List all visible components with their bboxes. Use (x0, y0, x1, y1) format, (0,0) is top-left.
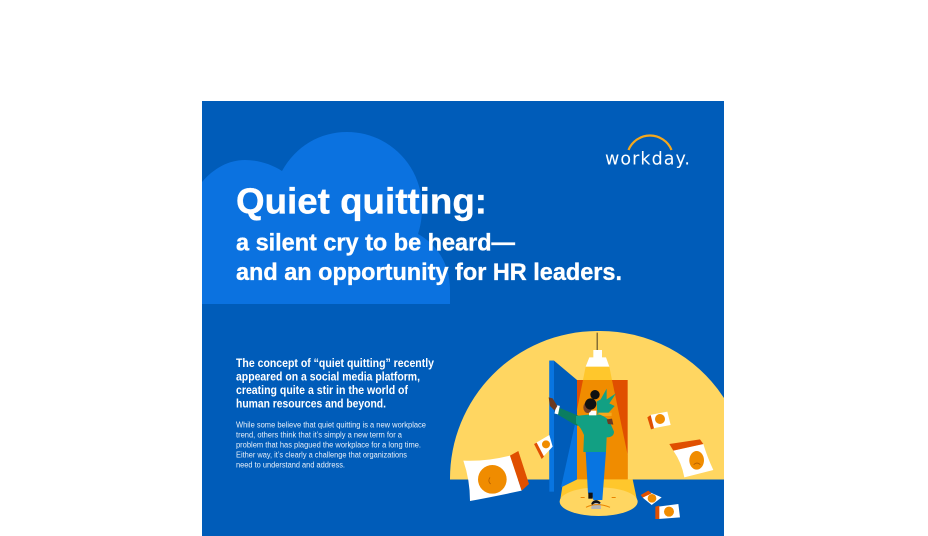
spotlight above the door (583, 367, 612, 380)
person (549, 390, 614, 509)
intro paragraph: appeared on a social media platform, (236, 372, 420, 384)
intro paragraph: creating quite a stir in the world of (236, 385, 408, 397)
arm reaching door (557, 407, 582, 426)
paper: bottom two (655, 504, 680, 519)
body paragraph (236, 420, 426, 470)
panel: blue background (202, 101, 724, 536)
plant (597, 389, 616, 416)
title: and an opportunity for HR leaders. (236, 259, 622, 286)
yellow semicircle (450, 331, 724, 480)
body paragraph: Either way, it’s clearly a challenge that organizations (236, 450, 407, 460)
intro paragraph (236, 358, 435, 410)
lamp (586, 333, 609, 367)
body paragraph: need to understand and address. (236, 460, 345, 470)
logo: workday: workday. (605, 150, 690, 170)
title: Quiet quitting: (236, 180, 487, 222)
neck and head (589, 411, 596, 415)
door leaf (549, 361, 577, 492)
cloud shape (202, 132, 450, 304)
legs (586, 452, 606, 500)
body paragraph: problem that has plagued the workplace for a long time. (236, 440, 421, 450)
intro paragraph: human resources and beyond. (236, 398, 386, 410)
lit area of door (561, 415, 577, 487)
jacket (576, 414, 614, 452)
intro paragraph: The concept of “quiet quitting” recently (236, 358, 435, 370)
hand on chest (607, 419, 613, 425)
shoes (588, 493, 593, 499)
illustration: person at door under spotlight (450, 331, 724, 519)
logo: workday (605, 136, 690, 170)
door frame (577, 380, 628, 479)
paper: bottom one (641, 491, 662, 505)
floor light ellipse (560, 487, 638, 516)
body paragraph: While some believe that quiet quitting is a new workplace (236, 420, 426, 430)
door opening lit by the cone (577, 380, 628, 479)
paper: small left (534, 435, 553, 459)
paper: right (669, 439, 713, 477)
spotlight below the door (560, 479, 637, 502)
title: a silent cry to be heard— (236, 230, 515, 256)
floor face marks (586, 505, 610, 507)
title (236, 180, 622, 286)
paper: large left (463, 451, 529, 501)
body paragraph: trend, others think that it’s simply a new term for a (236, 430, 403, 440)
paper: upper right (647, 412, 671, 429)
